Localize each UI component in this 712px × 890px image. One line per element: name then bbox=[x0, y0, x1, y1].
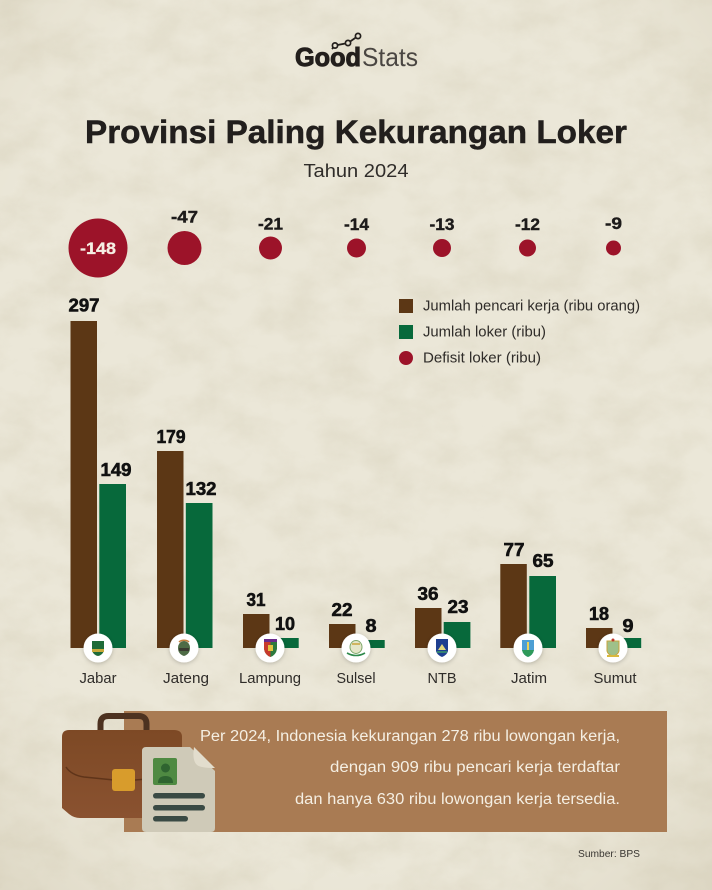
bars: Jateng: 179 bbox=[156, 427, 186, 447]
subtitle: Tahun 2024 bbox=[304, 160, 408, 181]
bubble: Jateng -47: -47 bbox=[171, 208, 198, 226]
bars: Jabar: 297 bbox=[68, 296, 100, 316]
emblem: Jateng bbox=[170, 634, 198, 662]
legend: vacancies: Jumlah loker (ribu) bbox=[423, 324, 546, 340]
province emblems and labels bbox=[80, 634, 637, 687]
bars: NTB: 36 bbox=[418, 584, 438, 604]
bars: Sumut bbox=[586, 604, 641, 648]
bars: Jatim: 65 bbox=[532, 551, 554, 571]
bars: Sulsel: 22 bbox=[332, 600, 352, 620]
label: Jateng: Jateng bbox=[163, 670, 209, 687]
emblem: NTB bbox=[428, 634, 456, 662]
bars: Lampung: 10 bbox=[275, 614, 295, 634]
emblem: Jabar bbox=[84, 634, 112, 662]
bubble: Jabar -148: -148 bbox=[80, 239, 116, 258]
bubble: Sulsel -14: -14 bbox=[344, 215, 370, 234]
emblem: Sulsel bbox=[342, 634, 370, 662]
deficit bubbles bbox=[68, 208, 622, 278]
legend bbox=[399, 298, 640, 366]
callout panel bbox=[124, 711, 667, 832]
emblem: Sumut bbox=[598, 634, 628, 662]
bars: Jateng: 132 bbox=[186, 479, 216, 499]
bubble: NTB -13: -13 bbox=[430, 215, 454, 234]
label: Lampung: Lampung bbox=[239, 670, 301, 687]
source: Sumber: BPS bbox=[578, 848, 640, 860]
bars: Jateng bbox=[156, 427, 216, 648]
label: Jatim: Jatim bbox=[511, 670, 547, 687]
legend: job seekers: Jumlah pencari kerja (ribu orang) bbox=[423, 298, 640, 314]
bubble: Sulsel -14 bbox=[344, 215, 370, 258]
legend: deficit: Defisit loker (ribu) bbox=[423, 350, 541, 366]
bubble: Jateng -47 bbox=[168, 208, 202, 265]
logo: GoodStats: Good bbox=[295, 42, 361, 72]
icon: CV document bbox=[142, 747, 215, 832]
bubble: Jabar -148 bbox=[68, 218, 128, 278]
callout text bbox=[200, 728, 620, 808]
bubble: Lampung -21: -21 bbox=[258, 214, 283, 234]
bars: Jabar bbox=[68, 296, 132, 648]
callout text: dan hanya 630 ribu lowongan kerja tersedia. bbox=[295, 791, 620, 808]
bubble: Jatim -12: -12 bbox=[515, 215, 540, 234]
label: Jabar: Jabar bbox=[80, 670, 116, 687]
label: Sulsel: Sulsel bbox=[336, 670, 376, 687]
callout text: dengan 909 ribu pencari kerja terdaftar bbox=[330, 759, 620, 776]
emblem: Lampung bbox=[256, 634, 284, 662]
label: NTB: NTB bbox=[428, 670, 456, 687]
logo: GoodStats: Stats bbox=[362, 42, 418, 72]
bars: Jatim: 77 bbox=[504, 540, 524, 560]
bars: NTB: 23 bbox=[448, 597, 468, 617]
bars: Sulsel: 8 bbox=[366, 616, 376, 636]
bars: Lampung bbox=[243, 590, 299, 648]
bubble: Lampung -21 bbox=[258, 214, 283, 260]
bars: Sumut: 18 bbox=[589, 604, 609, 624]
icon: briefcase bbox=[62, 716, 182, 818]
bubble: Jatim -12 bbox=[515, 215, 540, 256]
callout text: Per 2024, Indonesia kekurangan 278 ribu lowongan kerja, bbox=[200, 728, 620, 745]
logo: GoodStats bbox=[295, 33, 418, 72]
emblem: Jatim bbox=[514, 634, 542, 662]
bubble: Sumut -9 bbox=[605, 214, 622, 256]
title: Provinsi Paling Kekurangan Loker bbox=[85, 114, 627, 150]
bars: NTB bbox=[415, 584, 470, 648]
bubble: Sumut -9: -9 bbox=[605, 214, 622, 233]
bars: Sumut: 9 bbox=[622, 616, 634, 636]
bars: Jatim bbox=[500, 540, 556, 648]
label: Sumut: Sumut bbox=[594, 670, 637, 687]
bars: Sulsel bbox=[329, 600, 385, 648]
bar chart bbox=[68, 296, 641, 648]
bubble: NTB -13 bbox=[430, 215, 454, 257]
bars: Jabar: 149 bbox=[100, 460, 132, 480]
bars: Lampung: 31 bbox=[246, 590, 266, 610]
